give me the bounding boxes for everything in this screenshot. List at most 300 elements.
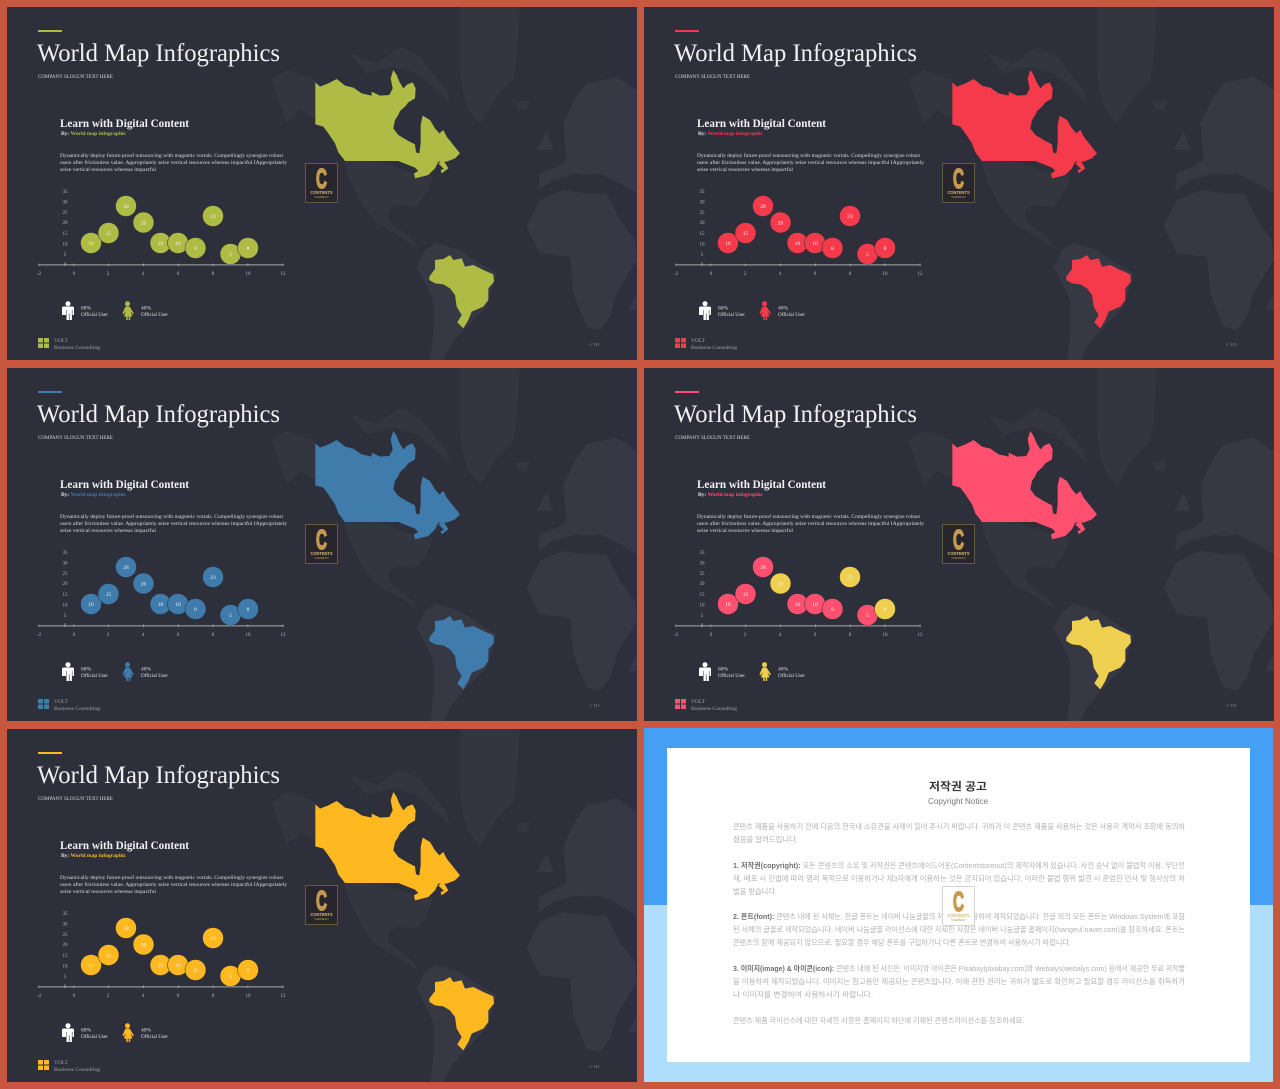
bubble chart: 10 [795, 241, 800, 247]
bubble chart: 12 [918, 633, 923, 638]
paragraph: users after frictionless value. Appropriately seize vertical resources whereas impactful IAppropriately [60, 881, 287, 888]
panel: amber slide [7, 729, 637, 1089]
bubble chart: 15 [62, 593, 68, 598]
bubble chart: 0 [64, 263, 67, 268]
icon: male user [62, 662, 74, 681]
male stat [718, 306, 745, 318]
male stat: 60% [718, 666, 728, 672]
byline: By: World map infographic [698, 131, 764, 137]
watermark badge: THEBEST [314, 917, 329, 921]
accent line [38, 30, 62, 32]
bubble chart: 6 [814, 633, 817, 638]
accent line [675, 30, 699, 32]
bubble chart: 20 [778, 220, 784, 226]
bubble chart: 8 [247, 246, 250, 252]
watermark badge: THEBEST [951, 556, 966, 560]
footer text: Business Consulting [54, 1068, 101, 1073]
bubble chart: 25 [700, 572, 705, 577]
title: World Map Infographics [37, 399, 280, 428]
male stat [718, 666, 745, 679]
bubble chart: 6 [177, 994, 180, 999]
bubble chart: 2 [107, 994, 110, 999]
closing note: 콘텐츠 제품 라이선스에 대한 자세한 사항은 홈페이지 하단에 기재된 콘텐츠라이선스를 참조하세요. [733, 1016, 1024, 1025]
bubble chart: 10 [175, 241, 181, 247]
female stat: Official User [778, 311, 805, 318]
paragraph: seize vertical resources whereas impactful [60, 166, 156, 173]
section: font: 된 서체의 글꼴로 제작되었습니다. 네이버 나눔글꼴 라이선스에 대한 자세한 사항은 네이버 나눔글꼴 홈페이지(hangeul.naver.com)를 참조하세요. 폰트는 [733, 925, 1185, 934]
bubble chart: 15 [106, 953, 112, 959]
male stat: 60% [81, 306, 92, 312]
bubble chart: 0 [710, 272, 713, 277]
map: canada [315, 792, 460, 900]
subheading: Learn with Digital Content [697, 479, 826, 491]
footer text: VOLT [691, 700, 705, 705]
male stat: 60% [81, 666, 92, 672]
paragraph [60, 874, 287, 895]
watermark badge: THEBEST [951, 195, 966, 199]
background world map [1054, 438, 1274, 721]
bubble chart: 8 [212, 272, 215, 277]
bubble chart: -2 [674, 633, 679, 638]
female stat: 40% [141, 666, 152, 672]
paragraph: Dynamically deploy future-proof outsourcing with magnetic vortals. Compellingly synergize robust [697, 152, 920, 159]
footer text: VOLT [54, 1061, 68, 1066]
bubble chart: 0 [701, 263, 704, 268]
male stat: Official User [81, 311, 108, 318]
slogan: COMPANY SLOGUN TEXT HERE [38, 74, 114, 80]
icon: male user [699, 301, 711, 320]
slogan: COMPANY SLOGUN TEXT HERE [38, 435, 114, 441]
panel: copyright notice [644, 728, 1273, 1082]
background world map [417, 438, 636, 721]
bubble chart: 12 [280, 633, 286, 638]
male stat [81, 666, 108, 679]
watermark badge: C [953, 524, 964, 555]
map: brazil [429, 616, 494, 689]
bubble chart: 25 [62, 933, 68, 938]
watermark badge [306, 885, 338, 924]
paragraph: Dynamically deploy future-proof outsourcing with magnetic vortals. Compellingly synergize robust [60, 513, 283, 520]
bubble chart: 35 [62, 912, 68, 917]
bubble chart: 8 [247, 968, 250, 974]
panel: green slide [7, 7, 637, 380]
bubble chart: 10 [175, 602, 181, 608]
section: image and icon: 나 이미지를 변경하여 사용하시기 바랍니다. [733, 990, 873, 999]
footer text [54, 1061, 101, 1073]
bubble chart: 35 [62, 190, 68, 195]
paragraph: users after frictionless value. Appropriately seize vertical resources whereas impactful IAppropriately [697, 520, 924, 527]
map: canada [952, 431, 1097, 539]
bubble chart: 15 [106, 231, 112, 237]
bubble chart: 20 [778, 582, 784, 588]
bubble chart: 12 [280, 994, 286, 999]
male stat [81, 306, 108, 318]
footer text: Business Consulting [691, 707, 738, 712]
map: brazil [429, 255, 494, 328]
watermark badge: C [953, 886, 964, 917]
male stat: Official User [718, 672, 745, 679]
bubble chart: 6 [814, 272, 817, 277]
paragraph: seize vertical resources whereas impactful [697, 166, 793, 173]
page number: // 01 [589, 1064, 600, 1069]
female stat: Official User [141, 672, 168, 679]
bubble chart: 15 [62, 232, 68, 237]
bubble chart: 30 [62, 200, 68, 206]
bubble chart: 12 [280, 272, 286, 277]
bubble chart: 23 [847, 214, 853, 220]
bubble chart: 10 [158, 602, 164, 608]
bubble chart [37, 912, 286, 999]
paragraph: seize vertical resources whereas impactful [60, 888, 156, 895]
female stat: 40% [778, 306, 788, 312]
subheading: Learn with Digital Content [60, 479, 189, 491]
subheading: Learn with Digital Content [697, 118, 826, 130]
bubble chart: 4 [142, 994, 145, 999]
bubble chart: 10 [246, 994, 251, 999]
bubble chart: 10 [175, 963, 181, 969]
watermark badge: C [316, 524, 327, 555]
subheading: Learn with Digital Content [60, 840, 189, 852]
footer text: Business Consulting [691, 346, 738, 351]
bubble chart: 5 [64, 253, 67, 258]
bubble chart: 0 [73, 272, 76, 277]
byline: By: World map infographic [61, 853, 127, 859]
bubble chart: 15 [743, 592, 748, 598]
bubble chart: 4 [142, 272, 145, 277]
bubble chart: 35 [62, 551, 68, 556]
notice heading: 저작권 공고 [929, 779, 987, 793]
icon: female user [122, 301, 134, 320]
subheading: Learn with Digital Content [60, 118, 189, 130]
paragraph: Dynamically deploy future-proof outsourcing with magnetic vortals. Compellingly synergize robust [60, 874, 283, 881]
bubble chart: 10 [812, 602, 818, 608]
bubble chart: 8 [194, 607, 197, 613]
bubble chart: 8 [831, 607, 834, 613]
bubble chart: 10 [88, 241, 94, 247]
bubble chart: 8 [849, 272, 852, 277]
bubble chart: 5 [64, 975, 67, 980]
section: copyright: 벌을 받습니다. [733, 887, 777, 896]
panel: pink and yellow slide [644, 368, 1274, 741]
bubble chart: 10 [62, 604, 68, 608]
bubble chart: 30 [700, 200, 705, 206]
bubble chart: 2 [744, 272, 747, 277]
bubble chart: 15 [700, 232, 705, 237]
bubble chart: 0 [64, 624, 67, 629]
bubble chart: 10 [62, 964, 68, 970]
byline: By: World map infographic [61, 131, 127, 137]
bubble chart: 0 [701, 624, 704, 629]
byline: By: World map infographic [698, 492, 764, 498]
footer text: Business Consulting [54, 707, 101, 712]
male stat: Official User [81, 672, 108, 679]
bubble chart: 10 [700, 242, 705, 248]
bubble chart: 10 [88, 602, 94, 608]
bubble chart: 25 [62, 211, 68, 216]
footer text [691, 700, 738, 712]
byline: By: World map infographic [61, 492, 127, 498]
paragraph: users after frictionless value. Appropriately seize vertical resources whereas impactful IAppropriately [60, 159, 287, 166]
watermark badge: CONTENTS [310, 190, 332, 195]
bubble chart: 10 [246, 272, 251, 277]
bubble chart [37, 551, 286, 638]
footer logo [675, 338, 686, 348]
bubble chart: 4 [779, 272, 782, 277]
footer text [54, 700, 101, 712]
bubble chart: 10 [62, 242, 68, 248]
bubble chart: 15 [106, 592, 112, 598]
background world map [1054, 77, 1274, 360]
bubble chart: 35 [700, 551, 705, 556]
bubble chart: 28 [123, 565, 129, 571]
watermark badge: C [316, 885, 327, 916]
slogan: COMPANY SLOGUN TEXT HERE [38, 796, 114, 802]
section: copyright: 1. 저작권(copyright): 모든 콘텐츠의 소유 및 저작권은 콘텐츠에이드어웃(Contentstoreout)의 제작자에게 있습니다. 사전 승낙 없이 불법적 이용, 무단전 [733, 861, 1185, 870]
bubble chart: 10 [158, 963, 164, 969]
page number: // 01 [1226, 703, 1237, 708]
paragraph: users after frictionless value. Appropriately seize vertical resources whereas impactful IAppropriately [697, 159, 924, 166]
female stat: 40% [141, 1028, 152, 1034]
bubble chart: 5 [701, 253, 704, 258]
map: brazil [429, 977, 494, 1050]
bubble chart: 23 [847, 575, 853, 581]
map: canada [952, 70, 1097, 178]
male stat: 60% [81, 1028, 92, 1034]
bubble chart: 30 [62, 922, 68, 928]
bubble chart: 20 [700, 582, 705, 587]
bubble chart: 8 [884, 607, 887, 613]
icon: female user [122, 1023, 134, 1042]
footer text: Business Consulting [54, 346, 101, 351]
background world map [417, 799, 636, 1082]
female stat: Official User [141, 1033, 168, 1040]
watermark badge: THEBEST [951, 918, 966, 922]
bubble chart: 5 [701, 614, 704, 619]
watermark badge: CONTENTS [948, 913, 970, 918]
footer logo [38, 338, 49, 348]
accent line [675, 391, 699, 393]
intro text: 셨음을 알려드립니다. [733, 835, 798, 844]
paragraph [697, 513, 924, 534]
bubble chart: 10 [700, 604, 705, 608]
female stat: 40% [141, 306, 152, 312]
bubble chart: 28 [760, 565, 766, 571]
bubble chart: 8 [194, 968, 197, 974]
male stat: Official User [718, 311, 745, 318]
bubble chart: 0 [64, 985, 67, 990]
female stat: Official User [778, 672, 805, 679]
bubble chart: 10 [158, 241, 164, 247]
section: font: 콘텐츠의 함께 제공되지 않으므로, 필요할 경우 해당 폰트를 구입하거나 다른 폰트로 변경하여 사용하시기 바랍니다. [733, 938, 1071, 947]
bubble chart [674, 190, 923, 277]
accent line [38, 752, 62, 754]
female stat [141, 666, 168, 679]
footer text: VOLT [691, 339, 705, 344]
bubble chart: 5 [229, 974, 232, 980]
map: canada [315, 70, 460, 178]
paragraph: Dynamically deploy future-proof outsourcing with magnetic vortals. Compellingly synergize robust [697, 513, 920, 520]
map: brazil [1066, 616, 1131, 689]
bubble chart: 6 [177, 633, 180, 638]
bubble chart: -2 [674, 272, 679, 277]
paragraph: seize vertical resources whereas impactful [697, 527, 793, 534]
paragraph: users after frictionless value. Appropriately seize vertical resources whereas impactful IAppropriately [60, 520, 287, 527]
footer text: VOLT [54, 700, 68, 705]
footer text: VOLT [54, 339, 68, 344]
watermark badge: C [316, 163, 327, 194]
footer logo [38, 1060, 49, 1070]
bubble chart: 5 [64, 614, 67, 619]
slogan: COMPANY SLOGUN TEXT HERE [675, 74, 751, 80]
accent line [38, 391, 62, 393]
bubble chart: 30 [62, 562, 68, 566]
bubble chart: 23 [210, 575, 216, 581]
section: image and icon: 3. 이미지(image) & 아이콘(icon): 콘텐츠 내에 된 사진은, 이미지와 아이콘은 Pixabay(pixabay.com)와 Webalys(webalys.com) 등에서 제공한 무료 저작물 [733, 964, 1185, 973]
bubble chart: 20 [62, 221, 68, 226]
watermark badge: CONTENTS [948, 190, 970, 195]
bubble chart: 15 [62, 954, 68, 959]
section: font [733, 912, 1185, 947]
notice subheading: Copyright Notice [928, 797, 989, 806]
watermark badge [306, 163, 338, 202]
bubble chart: 10 [725, 241, 731, 247]
watermark badge [942, 524, 974, 564]
bubble chart: 10 [812, 241, 818, 247]
icon: female user [759, 301, 771, 320]
bubble chart: 10 [795, 602, 800, 608]
bubble chart: 10 [725, 602, 731, 608]
background world map [417, 77, 636, 360]
bubble chart: 8 [247, 607, 250, 613]
bubble chart: 5 [866, 252, 869, 258]
female stat: 40% [778, 666, 788, 672]
title: World Map Infographics [674, 38, 917, 67]
bubble chart: 6 [177, 272, 180, 277]
bubble chart: 8 [831, 246, 834, 252]
bubble chart: -2 [37, 272, 42, 277]
icon: male user [699, 662, 711, 681]
male stat: Official User [81, 1033, 108, 1040]
map: brazil [1066, 255, 1131, 328]
section: image and icon [733, 964, 1185, 999]
female stat [141, 1028, 168, 1040]
bubble chart: 8 [212, 633, 215, 638]
female stat [778, 666, 805, 679]
footer text [54, 339, 101, 351]
title: World Map Infographics [37, 760, 280, 789]
map: canada [315, 431, 460, 539]
section: image and icon: 을 이용하여 제작되었습니다. 이미지는 참고용만 제공되는 콘텐츠입니다. 이에 관한 권리는 귀하가 별도로 확인하고 필요할 경우 라이선스를 취득하거 [733, 977, 1185, 986]
bubble chart: 30 [700, 562, 705, 566]
watermark badge: THEBEST [314, 195, 329, 199]
bubble chart [674, 551, 923, 638]
slogan: COMPANY SLOGUN TEXT HERE [675, 435, 751, 441]
bubble chart: 0 [73, 633, 76, 638]
female stat [141, 306, 168, 318]
bubble chart: 2 [744, 633, 747, 638]
watermark badge: CONTENTS [948, 551, 970, 556]
paragraph: Dynamically deploy future-proof outsourcing with magnetic vortals. Compellingly synergize robust [60, 152, 283, 159]
bubble chart: 20 [62, 582, 68, 587]
paragraph [60, 513, 287, 534]
icon: male user [62, 1023, 74, 1042]
bubble chart: 15 [700, 593, 705, 598]
bubble chart: 8 [849, 633, 852, 638]
bubble chart: 20 [141, 220, 146, 226]
paragraph [697, 152, 924, 173]
title: World Map Infographics [674, 399, 917, 428]
watermark badge: C [953, 163, 964, 194]
footer logo [38, 699, 49, 709]
bubble chart: 20 [700, 221, 705, 226]
section: copyright: 재, 배포 시 민법에 따라 영리 목적으로 이용하거나 제3자에게 이용하는 것은 금지되어 있습니다. 이러한 불법 행위 발견 시 준엄한 민사 및 형사상의 처 [733, 874, 1185, 883]
female stat [778, 306, 805, 318]
watermark badge [942, 163, 974, 202]
bubble chart: 20 [141, 942, 146, 948]
white card [667, 748, 1250, 1062]
watermark badge [942, 886, 974, 926]
intro text [733, 822, 1185, 844]
watermark badge: THEBEST [314, 556, 329, 560]
bubble chart: 35 [700, 190, 705, 195]
watermark badge: CONTENTS [310, 551, 332, 556]
page number: // 01 [589, 342, 600, 347]
title: World Map Infographics [37, 38, 280, 67]
bubble chart: 10 [88, 963, 94, 969]
bubble chart: 25 [700, 211, 705, 216]
bubble chart: 2 [107, 633, 110, 638]
bubble chart: 2 [107, 272, 110, 277]
bubble chart: 8 [212, 994, 215, 999]
bubble chart: 10 [882, 272, 888, 277]
bubble chart: 10 [246, 633, 251, 638]
bubble chart: 28 [123, 926, 129, 932]
watermark badge: CONTENTS [310, 912, 332, 917]
bubble chart: 23 [210, 936, 216, 942]
bubble chart: 0 [710, 633, 713, 638]
icon: female user [122, 662, 134, 681]
male stat: 60% [718, 306, 728, 312]
bubble chart: 28 [760, 204, 766, 210]
bubble chart: 5 [866, 613, 869, 619]
bubble chart: 10 [882, 633, 888, 638]
bubble chart: 20 [141, 582, 146, 588]
icon: female user [759, 662, 771, 681]
bubble chart [37, 190, 286, 277]
bubble chart: 5 [229, 613, 232, 619]
panel: blue slide [7, 368, 637, 741]
bubble chart: 4 [142, 633, 145, 638]
paragraph [60, 152, 287, 173]
bubble chart: -2 [37, 633, 42, 638]
panel: red slide [644, 7, 1274, 380]
bubble chart: 0 [73, 994, 76, 999]
icon: male user [62, 301, 74, 320]
bubble chart: 15 [743, 231, 748, 237]
bubble chart: 25 [62, 572, 68, 577]
bubble chart: 23 [210, 214, 216, 220]
bubble chart: 28 [123, 204, 129, 210]
bubble chart: 5 [229, 252, 232, 258]
section: font: 2. 폰트(font): 콘텐츠 내에 된 서체는, 한글 폰트는 네이버 나눔글꼴의 저작물을 사용하여 제작되었습니다. 한글 외의 모든 폰트는 Windows System에 포함 [733, 912, 1185, 921]
page number: // 01 [1226, 342, 1237, 347]
footer text [691, 339, 738, 351]
bubble chart: -2 [37, 994, 42, 999]
section: copyright [733, 861, 1185, 896]
page number: // 01 [589, 703, 600, 708]
bubble chart: 8 [884, 246, 887, 252]
bubble chart: 4 [779, 633, 782, 638]
